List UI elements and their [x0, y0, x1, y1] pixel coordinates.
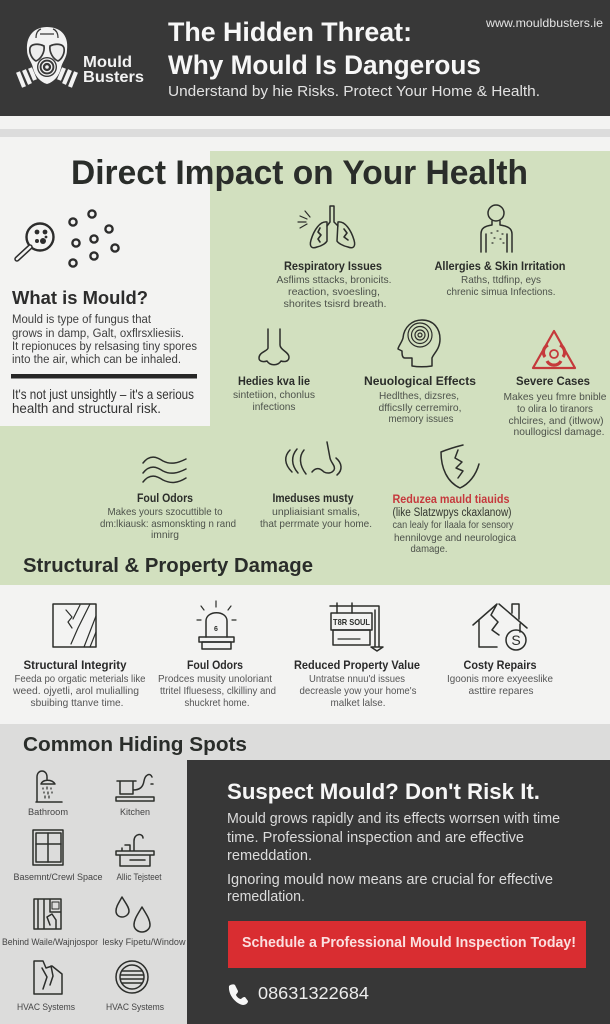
- item: reduced property value: decreasle yow your home's: [300, 686, 416, 697]
- icon: kitchen tap: [116, 774, 154, 801]
- spot: kitchen: [116, 774, 154, 817]
- item: reduced property value: Reduced Property Value: [294, 660, 420, 672]
- definition text: into the air, which can be inhaled.: [12, 352, 181, 366]
- icon: sink: [116, 835, 154, 866]
- cta paragraph 1: Mould grows rapidly and its effects worrsen with time: [227, 811, 560, 827]
- item: foul odors: imnirg: [151, 530, 179, 541]
- item: severe cases: Makes yeu fmre bnible: [504, 392, 607, 403]
- icon: nose: [259, 329, 289, 365]
- spot: leaky pipes: lesky Fipetu/Window: [102, 937, 186, 947]
- logo wordmark: Busters: [83, 69, 144, 86]
- spot: behind walls: [2, 899, 98, 947]
- cta paragraph 2: Ignoring mould now means are crucial for effective: [227, 872, 553, 888]
- icon: magnifier: [17, 224, 54, 259]
- item: severe cases: Severe Cases: [516, 376, 590, 388]
- item: allergies and skin irritation: Raths, ttdfinp, eys: [461, 275, 541, 286]
- item: foul odors alarm: Foul Odors: [187, 660, 243, 672]
- logo wordmark: [83, 54, 144, 86]
- item: respiratory issues: reaction, svoesling,: [288, 287, 380, 298]
- item: reduce mould toxins: [392, 445, 516, 555]
- spot: basement: [14, 830, 103, 882]
- item: foul odors: dm:lkiausk: asmonskting n rand: [100, 519, 236, 530]
- item: costly repairs: asttire repares: [468, 686, 534, 697]
- icon: wall panels: [34, 899, 61, 929]
- item: allergies and skin irritation: chrenic simua Infections.: [446, 287, 556, 298]
- item: neurological effects: Hedlthes, dizsres,: [379, 391, 459, 402]
- item: sinus: sintetiion, chonlus: [233, 390, 315, 401]
- icon: alarm light: [197, 601, 236, 649]
- icon: round vent: [116, 961, 148, 993]
- spot: basement: Basemnt/Crewl Space: [14, 872, 103, 882]
- panel: what is mould: [11, 210, 197, 416]
- icon: damaged wall: [34, 961, 62, 994]
- item: respiratory issues: Respiratory Issues: [284, 261, 382, 273]
- item: sinus: Hedies kva lie: [238, 376, 310, 388]
- item: neurological effects: memory issues: [388, 414, 454, 425]
- cta heading: Suspect Mould? Don't Risk It.: [227, 779, 540, 804]
- panel: common hiding spots: [0, 724, 610, 1024]
- icon: phone: [229, 984, 248, 1005]
- item: severe cases: [504, 331, 607, 438]
- definition text: Mould is type of fungus that: [12, 312, 152, 326]
- item: structural integrity: [12, 604, 146, 709]
- item: foul odors: Foul Odors: [137, 493, 193, 505]
- icon: cracked shield: [441, 445, 479, 488]
- item: reduce mould toxins: damage.: [410, 544, 448, 555]
- panel: call to action: [187, 760, 610, 1024]
- cta paragraph 1: [227, 811, 560, 864]
- spot: hvac left: HVAC Systems: [17, 1002, 76, 1012]
- icon: person with rash: [481, 205, 512, 252]
- definition text: It repionuces by relsasing tiny spores: [12, 339, 197, 353]
- item: structural integrity: weed. ojyetli, arol mulialling: [12, 686, 139, 697]
- website: www.mouldbusters.ie: [485, 16, 603, 30]
- item: reduce mould toxins: can lealy for Ilaala for sensory: [392, 520, 514, 531]
- cta button: [228, 921, 586, 968]
- item: foul odors alarm: ttritel Ifluesess, clkilliny and: [160, 686, 276, 697]
- item: reduced property value: [294, 603, 420, 709]
- item: musty smells: [260, 442, 372, 530]
- item: foul odors: Makes yours szocuttible to: [108, 507, 223, 518]
- item: costly repairs: Igoonis more exyeeslike: [447, 674, 553, 685]
- icon: biohazard warning: [533, 331, 575, 368]
- item: reduce mould toxins: (like Slatzwpys ckaxlanow): [392, 507, 512, 519]
- icon: lungs: [298, 206, 355, 248]
- item: neurological effects: dfficsIly cerremiro,: [378, 403, 462, 414]
- icon: cracked house and dollar: [473, 604, 527, 650]
- icon: for sale sign: [330, 603, 383, 651]
- icon: cracked wall: [53, 604, 96, 647]
- spot: behind walls: Behind Waile/Wajnjospor: [2, 937, 98, 947]
- spot: kitchen: Kitchen: [120, 807, 150, 817]
- spot: leaky pipes: [102, 897, 186, 947]
- title: Why Mould Is Dangerous: [168, 50, 481, 80]
- heading: hiding spots: Common Hiding Spots: [23, 734, 247, 756]
- item: foul odors: [100, 457, 236, 541]
- phone number: 08631322684: [258, 983, 369, 1003]
- item: severe cases: noullogicsl damage.: [514, 427, 604, 438]
- icon: spores: [69, 210, 119, 267]
- logo: gas mask: [18, 27, 76, 87]
- item: severe cases: chlcires, and (itlwow): [508, 416, 604, 427]
- item: foul odors alarm: Prodces musity unoloriant: [158, 674, 272, 685]
- icon: nose sniffing: [286, 442, 341, 475]
- item: reduced property value: Untratse nnuu'd issues: [309, 674, 405, 685]
- icon: window: [33, 830, 63, 865]
- item: respiratory issues: [276, 206, 392, 310]
- item: costly repairs: [447, 604, 553, 697]
- heading: structural damage: Structural & Property Damage: [23, 555, 313, 577]
- title: The Hidden Threat:: [168, 17, 412, 47]
- header banner: [0, 0, 610, 116]
- subtitle: Understand by hie Risks. Protect Your Home & Health.: [168, 83, 540, 100]
- item: structural integrity: Structural Integrity: [24, 660, 127, 672]
- definition text: [12, 312, 197, 366]
- definition text: grows in damp, Galt, oxflrsxliesiis.: [12, 326, 184, 340]
- risk statement: [12, 386, 194, 416]
- heading: what is mould: What is Mould?: [12, 287, 148, 308]
- logo wordmark: Mould: [83, 54, 132, 71]
- panel: structural damage: [0, 585, 610, 724]
- item: allergies and skin irritation: Allergies & Skin Irritation: [434, 261, 566, 273]
- item: musty smells: that perrmate your home.: [260, 519, 372, 530]
- item: allergies and skin irritation: [434, 205, 566, 298]
- item: neurological effects: Neuological Effects: [364, 376, 476, 388]
- item: neurological effects: [364, 320, 476, 425]
- heading: direct impact: Direct Impact on Your Health: [71, 154, 528, 192]
- item: foul odors alarm: [158, 601, 276, 709]
- risk statement: It's not just unsightly – it's a serious: [12, 386, 194, 402]
- risk statement: health and structural risk.: [12, 400, 161, 416]
- item: reduced property value: malket lalse.: [330, 698, 386, 709]
- item: sinus: infections: [252, 402, 296, 413]
- item: severe cases: to olira lo tiranors: [517, 404, 593, 415]
- icon: odor waves: [143, 457, 186, 482]
- item: reduce mould toxins: hennilovge and neurologica: [394, 533, 516, 544]
- spot: attic: [116, 835, 162, 882]
- item: respiratory issues: shorites tsisrd breath.: [284, 299, 386, 310]
- item: respiratory issues: Asflims sttacks, bronicits.: [276, 275, 392, 286]
- title: [168, 17, 481, 80]
- cta paragraph 1: time. Professional inspection and are effective: [227, 830, 524, 846]
- item: costly repairs: S: [511, 632, 521, 648]
- item: costly repairs: Costy Repairs: [464, 660, 536, 672]
- item: reduce mould toxins: Reduzea mauld tiauids: [392, 492, 510, 506]
- item: sinus: [233, 329, 315, 413]
- item: structural integrity: Feeda po orgatic meterials like: [14, 674, 146, 685]
- item: foul odors alarm: 6: [214, 626, 218, 633]
- item: musty smells: Imeduses musty: [272, 493, 354, 505]
- item: musty smells: unpliaisiant smalis,: [272, 507, 360, 518]
- icon: shower: [36, 771, 62, 802]
- cta button: Schedule a Professional Mould Inspection Today!: [242, 935, 576, 951]
- panel: health impact background: [0, 151, 610, 585]
- spot: hvac right: HVAC Systems: [106, 1002, 165, 1012]
- spot: attic: Allic Tejsteet: [116, 872, 162, 882]
- item: structural integrity: sbuibing ttanve time.: [30, 698, 124, 709]
- grey divider band: [0, 129, 610, 137]
- item: reduced property value: T8R SOUL: [333, 617, 370, 627]
- cta paragraph 2: remedlation.: [227, 889, 305, 905]
- spot: hvac right: [106, 961, 165, 1012]
- cta paragraph 2: [227, 872, 553, 905]
- spot: bathroom: [28, 771, 68, 817]
- spot: bathroom: Bathroom: [28, 807, 68, 817]
- spot: hvac left: [17, 961, 76, 1012]
- icon: head with spiral: [398, 320, 440, 367]
- cta paragraph 1: remeddation.: [227, 848, 312, 864]
- item: foul odors alarm: shuckret home.: [184, 698, 250, 709]
- icon: water drops: [116, 897, 150, 932]
